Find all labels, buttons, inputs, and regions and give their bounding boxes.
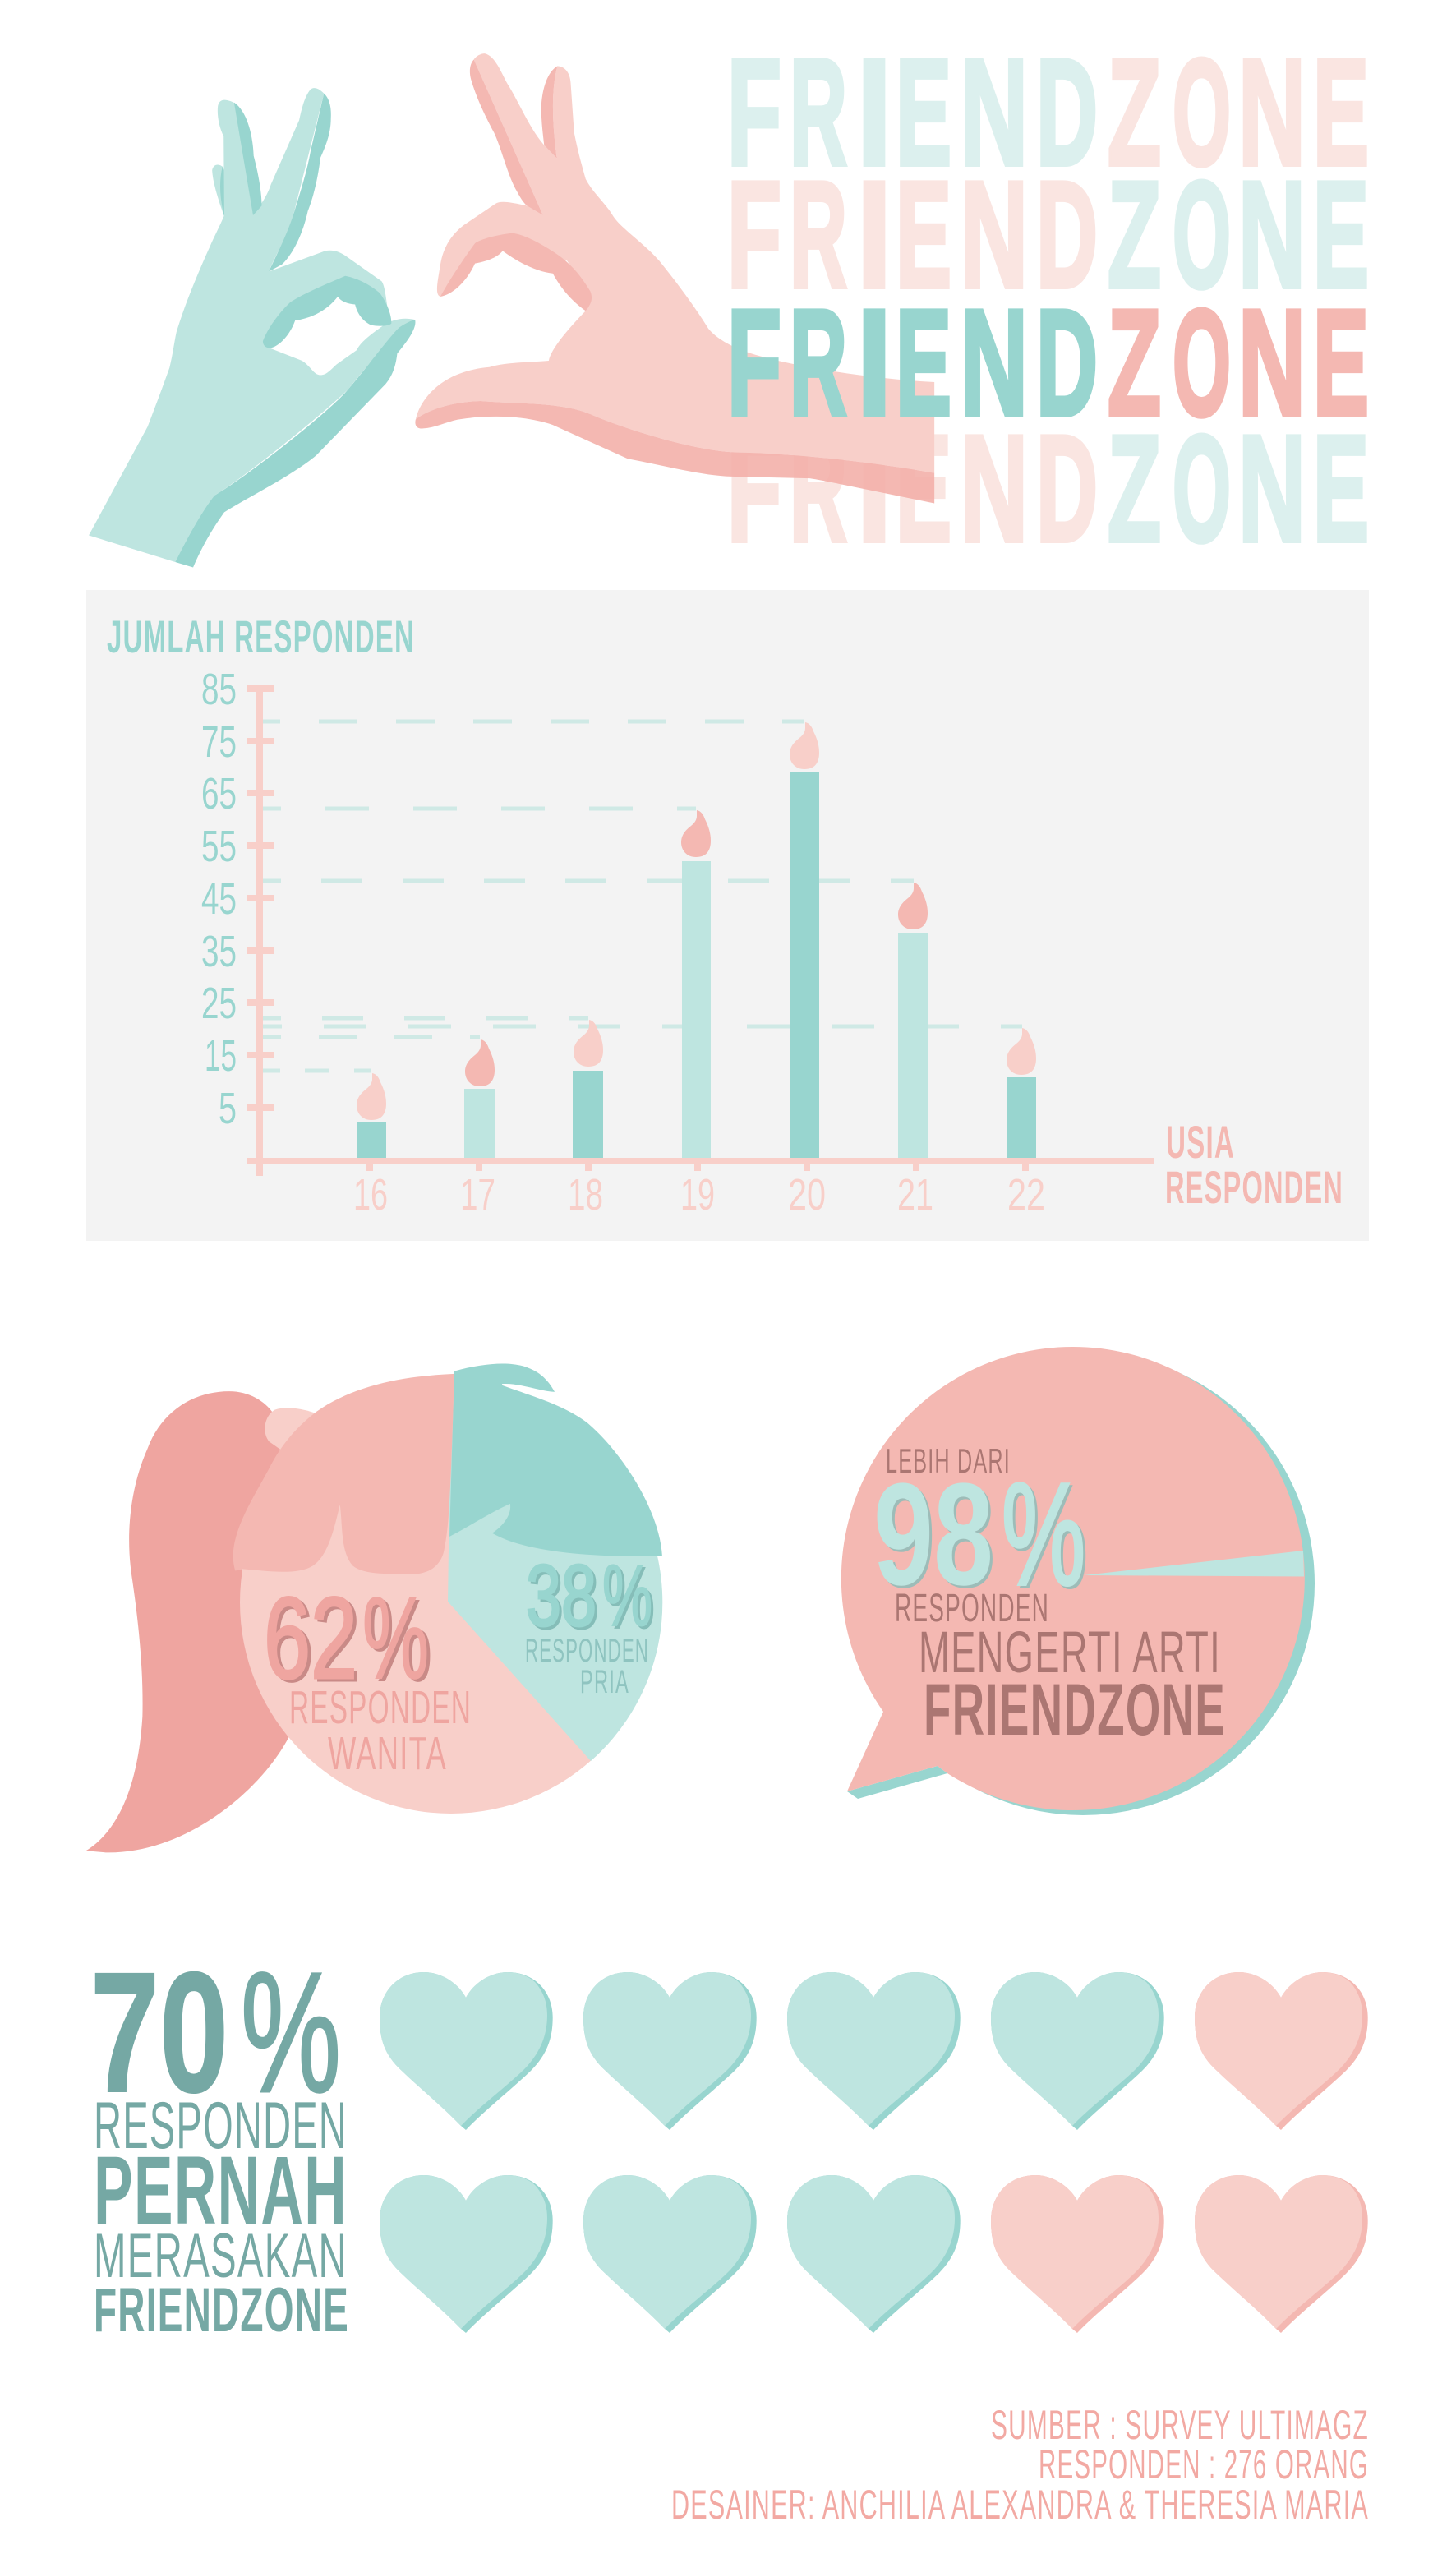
pie wedge 2 percent — [1084, 1551, 1304, 1576]
y axis labels: 65 — [201, 769, 237, 818]
candle flames — [357, 722, 1036, 1120]
title row 1: FRIENDZONE: Z — [1108, 27, 1161, 196]
y axis labels: 45 — [201, 874, 237, 924]
title row 2: FRIENDZONE: E — [896, 150, 951, 319]
title row 1: FRIENDZONE: N — [1238, 27, 1306, 196]
title row 3: FRIENDZONE highlighted: N — [1238, 278, 1306, 447]
x axis labels: 19 — [680, 1170, 715, 1219]
speech bubble — [841, 1347, 1305, 1810]
text: mengerti arti: MENGERTI ARTI — [919, 1620, 1221, 1685]
x axis labels: 21 — [897, 1170, 933, 1219]
title row 3: FRIENDZONE highlighted: F — [727, 278, 781, 447]
y axis labels: 25 — [201, 979, 237, 1028]
text: responden: RESPONDEN — [895, 1587, 1049, 1630]
y axis labels: 75 — [201, 717, 237, 767]
title row 4: FRIENDZONE: Z — [1108, 403, 1161, 573]
title row 1: FRIENDZONE: O — [1173, 27, 1231, 196]
x axis labels: 22 — [1007, 1170, 1045, 1219]
title row 4: FRIENDZONE — [727, 403, 1369, 573]
title row 1: FRIENDZONE: F — [727, 27, 781, 196]
pie slice: 38 percent men — [448, 1391, 662, 1761]
icon: pink hand heart half — [415, 53, 934, 503]
title row 4: FRIENDZONE: O — [1173, 403, 1231, 573]
stat: 62 percent: 62 — [264, 1573, 357, 1703]
y axis labels: 5 — [219, 1084, 237, 1133]
title row 4: FRIENDZONE: R — [790, 403, 847, 573]
title row 2: FRIENDZONE — [727, 150, 1369, 319]
title row 3: FRIENDZONE highlighted: Z — [1108, 278, 1161, 447]
label: responden pria: PRIA — [580, 1664, 629, 1700]
title row 2: FRIENDZONE: F — [727, 150, 781, 319]
title row 2: FRIENDZONE: O — [1173, 150, 1231, 319]
text: merasakan: MERASAKAN — [94, 2221, 348, 2291]
title row 3: FRIENDZONE highlighted: E — [896, 278, 951, 447]
hearts grid 7 of 10 — [380, 1972, 1368, 2333]
heart row 1 — [380, 1972, 1368, 2130]
title row 2: FRIENDZONE: D — [1036, 150, 1098, 319]
title row 2: FRIENDZONE: Z — [1108, 150, 1161, 319]
stat: 38 percent: % — [605, 1550, 655, 1647]
text: friendzone: FRIENDZONE — [94, 2275, 349, 2345]
x axis labels: 18 — [568, 1170, 603, 1219]
stat: 98 percent: 98 — [876, 1455, 996, 1618]
pie slice: 62 percent women — [240, 1391, 662, 1814]
title row 2: FRIENDZONE: N — [961, 150, 1028, 319]
x axis with ticks — [247, 1158, 1154, 1171]
x axis labels: 20 — [788, 1170, 826, 1219]
title row 2: FRIENDZONE: I — [857, 150, 892, 319]
y axis labels — [201, 665, 237, 1133]
title row 1: FRIENDZONE: E — [1313, 27, 1369, 196]
stat: 38 percent: 38 — [526, 1547, 597, 1644]
y axis labels: 35 — [201, 927, 237, 976]
title row 4: FRIENDZONE: I — [857, 403, 892, 573]
title row 1: FRIENDZONE: R — [790, 27, 847, 196]
title row 1: FRIENDZONE: N — [961, 27, 1028, 196]
title row 1: FRIENDZONE: D — [1036, 27, 1098, 196]
label: responden wanita — [289, 1681, 472, 1780]
x axis title: USIA — [1166, 1116, 1235, 1168]
title row 2: FRIENDZONE: R — [790, 150, 847, 319]
bubble shadow — [847, 1766, 947, 1799]
title row 3: FRIENDZONE highlighted: R — [790, 278, 847, 447]
title row 1: FRIENDZONE: I — [857, 27, 892, 196]
stat: 98 percent: % — [1004, 1455, 1088, 1618]
stat: 38 percent: % — [602, 1547, 652, 1644]
y axis labels: 55 — [201, 822, 237, 871]
footer credits — [671, 2402, 1369, 2528]
y axis labels: 15 — [205, 1031, 237, 1081]
text: friendzone: FRIENDZONE — [924, 1668, 1226, 1750]
x axis labels: 17 — [460, 1170, 495, 1219]
title row 4: FRIENDZONE: E — [896, 403, 951, 573]
label: responden pria — [525, 1633, 649, 1700]
title row 2: FRIENDZONE: N — [1238, 150, 1306, 319]
y axis with ticks — [247, 685, 274, 1176]
title row 4: FRIENDZONE: E — [1313, 403, 1369, 573]
bars — [357, 772, 1036, 1159]
stat: 38 percent: 38 — [528, 1550, 599, 1647]
title row 1: FRIENDZONE: E — [896, 27, 951, 196]
stat: 62 percent: 62 — [267, 1575, 361, 1705]
chart title: JUMLAH RESPONDEN — [107, 611, 415, 662]
heart row 2 — [380, 2175, 1368, 2333]
title row 4: FRIENDZONE: N — [961, 403, 1028, 573]
hair bun — [265, 1408, 315, 1450]
y axis labels: 85 — [201, 665, 237, 714]
panel: 70 percent statement — [90, 1938, 349, 2345]
title row 3: FRIENDZONE highlighted: O — [1173, 278, 1231, 447]
pink hair — [233, 1374, 454, 1574]
title row 3: FRIENDZONE highlighted: N — [961, 278, 1028, 447]
label: responden wanita: WANITA — [328, 1727, 447, 1780]
stat: 98 percent: % — [1002, 1453, 1085, 1616]
ponytail — [86, 1391, 289, 1852]
text: pernah: PERNAH — [94, 2137, 348, 2245]
title row 4: FRIENDZONE: D — [1036, 403, 1098, 573]
stat: 98 percent: 98 — [873, 1453, 993, 1616]
stat: 70 percent: 70 — [90, 1938, 228, 2128]
x axis title — [1165, 1116, 1343, 1213]
panel: speech bubble 98 percent — [841, 1347, 1315, 1815]
title row 3: FRIENDZONE highlighted: E — [1313, 278, 1369, 447]
stat: 62 percent: % — [366, 1575, 432, 1705]
title row 3: FRIENDZONE highlighted: D — [1036, 278, 1098, 447]
teal hair — [449, 1363, 662, 1556]
x axis labels: 16 — [353, 1170, 388, 1219]
text: responden: RESPONDEN — [94, 2089, 348, 2163]
panel: candle bar chart — [86, 590, 1369, 1241]
title row 3: FRIENDZONE highlighted: I — [857, 278, 892, 447]
title row 4: FRIENDZONE: N — [1238, 403, 1306, 573]
title row 1: FRIENDZONE — [727, 27, 1369, 196]
stat: 62 percent: % — [362, 1573, 429, 1703]
label: responden wanita: RESPONDEN — [289, 1681, 472, 1734]
label: responden pria: RESPONDEN — [525, 1633, 649, 1669]
x axis labels — [353, 1170, 1045, 1219]
icon: teal hand ok sign — [89, 88, 415, 568]
stat: 70 percent: % — [241, 1938, 341, 2128]
title row 4: FRIENDZONE: F — [727, 403, 781, 573]
text: lebih dari: LEBIH DARI — [886, 1441, 1011, 1480]
title row 2: FRIENDZONE: E — [1313, 150, 1369, 319]
title row 3: FRIENDZONE highlighted — [727, 278, 1369, 447]
panel: gender pie chart as head — [86, 1363, 662, 1852]
